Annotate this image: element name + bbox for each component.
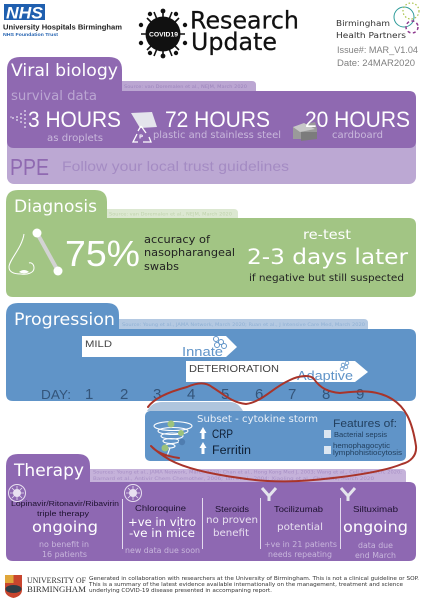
column: steroids: no proven [206, 515, 258, 526]
day axis: 7 [288, 386, 296, 403]
column: steroids: benefit [213, 528, 249, 539]
features list: Features of: [333, 418, 397, 430]
footer: University of Birmingham logo: UNIVERSITY OF [27, 576, 87, 585]
stat: 20 hours: cardboard [332, 130, 383, 141]
footer: University of Birmingham logo: BIRMINGHAM [27, 585, 86, 594]
accuracy text: nasopharangeal [144, 247, 235, 259]
sources tab: Barnard et al., Antivir Chem Chemother, 2006; Tan et al., 2004; Xiaoling et al., ChinaXiv, March 2020 [93, 476, 374, 481]
icon: plastic sheet and recycling: P [139, 134, 143, 140]
NHS logo: NHS Foundation Trust [3, 32, 59, 37]
arrow: mild innate [82, 336, 237, 359]
stat: 20 hours: 20 HOURS [305, 107, 410, 132]
arrow: deterioration adaptive: Adaptive [297, 368, 353, 383]
heading: Viral biology [11, 61, 118, 80]
column: steroids: Steroids [215, 504, 249, 514]
purple panel body [6, 454, 416, 561]
PPE text: PPE [10, 154, 49, 180]
arrow: mild innate: Innate [182, 344, 223, 359]
re-test callout: if negative but still suspected [249, 273, 404, 284]
Birmingham Health Partners logo: Birmingham [336, 19, 390, 28]
PPE background band [7, 135, 416, 184]
footer: disclaimer: This is a summary of the latest evidence available internationally on the management, treatment and science [88, 582, 403, 588]
day axis: 6 [255, 386, 263, 403]
column: tocilizumab: potential [277, 522, 323, 533]
column: lopinavir: triple therapy [37, 509, 89, 518]
day axis: 5 [221, 386, 229, 403]
features list: hemophagocytic [333, 443, 391, 450]
column: lopinavir: Lopinavir/Ritonavir/Ribavirin [11, 499, 119, 508]
source tab [104, 209, 238, 218]
re-test callout: 2-3 days later [247, 245, 408, 269]
footer: disclaimer [88, 576, 419, 594]
marker: CRP raised [200, 427, 233, 441]
heading: Therapy [13, 461, 84, 480]
NHS logo: University Hospitals Birmingham [3, 24, 122, 32]
features list: Bacterial sepsis [334, 430, 387, 439]
NHS logo [3, 4, 122, 37]
day axis [41, 386, 364, 403]
footer: disclaimer: Generated in collaboration with researchers at the University of Birmingham. This is not a clinical guideline or SOP. [89, 576, 419, 582]
features list: lymphohistiocytosis [333, 450, 403, 457]
footer: disclaimer: underlying COVID-19 disease presented in accompaning report. [89, 588, 272, 594]
column: tocilizumab: needs repeating [268, 550, 332, 559]
marker: ferritin raised [200, 442, 251, 457]
column: siltuximab: end March [355, 551, 396, 560]
day axis: 9 [356, 386, 364, 403]
footer: University of Birmingham logo [5, 575, 87, 598]
PPE text: Follow your local trust guidelines [62, 158, 289, 174]
icon: droplets [10, 110, 26, 128]
purple panel body [7, 57, 416, 148]
Birmingham Health Partners logo [336, 3, 419, 40]
column: lopinavir [8, 484, 119, 559]
column: siltuximab: Siltuximab [353, 504, 398, 514]
icon: tornado [154, 420, 192, 456]
panel: therapy [6, 454, 416, 561]
arrow: deterioration adaptive: DETERIORATION [189, 364, 279, 375]
column: siltuximab: data due [358, 541, 393, 550]
column: tocilizumab [262, 488, 337, 559]
NHS logo: NHS [6, 4, 43, 22]
column: siltuximab: ongoing [343, 518, 408, 536]
icon: COVID19 virus [139, 9, 187, 58]
blue panel body [6, 303, 416, 401]
icon: nose and swab [9, 228, 62, 276]
accuracy text: swabs [144, 261, 179, 273]
title: Update [191, 28, 277, 56]
title: Research [190, 6, 299, 34]
column: tocilizumab: +ve in 21 patients [264, 540, 337, 549]
day axis: 1 [85, 386, 93, 403]
title [190, 6, 299, 56]
source tab [115, 319, 368, 329]
column: tocilizumab: Tocilizumab [274, 504, 323, 514]
arrow: deterioration adaptive [186, 361, 368, 383]
column: steroids [206, 504, 258, 539]
issue and date [337, 45, 418, 68]
column: lopinavir: no benefit in [39, 540, 89, 549]
stat: 72 hours [153, 107, 281, 141]
accuracy text [144, 234, 235, 273]
source tab: Source: van Doremalen et al., NEJM, March 2020 [124, 84, 247, 90]
sources tab: Sources: Young et al., JAMA Network, March 2020; Chan et al., Hong Kong Med J, 2003; Wang et al., Cell Research, 2020; [93, 470, 402, 474]
re-test callout: re-test [303, 228, 351, 243]
heading: Progression [14, 310, 115, 329]
day axis: DAY: [41, 387, 71, 402]
column: chloroquine: -ve in mice [129, 526, 195, 540]
marker: CRP raised: CRP [212, 429, 233, 441]
day axis: 3 [153, 386, 161, 403]
source tab [118, 81, 256, 91]
day axis: 4 [187, 386, 195, 403]
column: chloroquine: Chloroquine [135, 503, 186, 513]
annotation: red hand-drawn circle [148, 376, 416, 481]
column: chloroquine: +ve in vitro [128, 515, 196, 529]
panel: cytokine storm subset [145, 402, 406, 461]
column: chloroquine [124, 484, 200, 555]
Birmingham Health Partners logo: Health Partners [336, 31, 406, 40]
stat: 3 hours: as droplets [47, 133, 103, 144]
stat: 3 hours [28, 107, 121, 144]
icon: COVID19 virus: COVID19 [149, 32, 178, 38]
issue and date: Date: 24MAR2020 [337, 58, 415, 68]
icon: plastic sheet and recycling [131, 112, 157, 142]
source tab: Source: Young et al., JAMA Network, March 2020; Ruan et al., J Intensive Care Med, March 2020 [122, 322, 365, 328]
stat: 72 hours: 72 HOURS [165, 107, 270, 132]
heading: Diagnosis [14, 197, 97, 216]
features list [324, 418, 403, 457]
marker: ferritin raised: Ferritin [212, 445, 251, 457]
column: lopinavir: 16 patients [42, 550, 87, 559]
subset heading: Subset - cytokine storm [197, 414, 318, 425]
icon: cardboard box [293, 122, 317, 141]
panel: viral biology [7, 57, 416, 184]
arrow: mild innate: MILD [85, 339, 112, 350]
column: chloroquine: new data due soon [125, 546, 200, 555]
stat: 72 hours: plastic and stainless steel [153, 130, 281, 141]
column: lopinavir: ongoing [32, 518, 98, 536]
column dividers [122, 498, 340, 549]
day axis: 8 [322, 386, 330, 403]
column: siltuximab [341, 488, 408, 560]
stat: 75 percent: 75% [65, 233, 140, 274]
sources tab [86, 469, 406, 482]
accuracy text: accuracy of [144, 234, 210, 246]
issue and date: Issue#: MAR_V1.04 [337, 45, 418, 55]
panel: progression [6, 303, 416, 403]
green panel body [6, 190, 416, 297]
day axis: 2 [120, 386, 128, 403]
re-test callout [247, 228, 408, 284]
PPE text [10, 154, 289, 180]
survival data label: survival data [11, 89, 97, 104]
stat: 3 hours: 3 HOURS [28, 107, 121, 132]
source tab: Source: van Doremalen et al., NEJM, March 2020 [109, 212, 232, 216]
panel: diagnosis [6, 190, 416, 297]
